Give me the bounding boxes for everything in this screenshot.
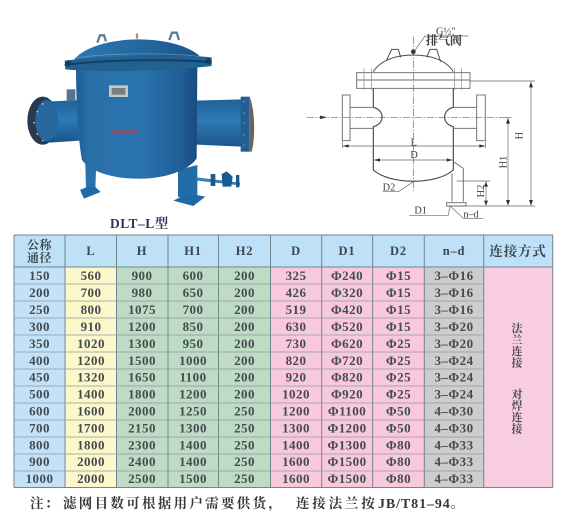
row 500: 3–Φ24 [434, 386, 474, 402]
row 900: 4–Φ33 [434, 454, 474, 469]
row 700: 250 [234, 420, 255, 436]
nameplate [109, 85, 128, 97]
row 200 [29, 285, 474, 300]
row 800 [29, 438, 474, 452]
row 300: 300 [29, 319, 50, 334]
row 350: 950 [183, 336, 203, 351]
row 500: 200 [234, 386, 255, 402]
row 450: 200 [234, 370, 255, 384]
row 600: Φ1100 [328, 404, 366, 418]
row 500: 1800 [128, 386, 156, 402]
row 250: 519 [286, 302, 306, 317]
row 1000 [26, 471, 474, 486]
row 700: Φ1200 [327, 420, 367, 436]
row 150: 150 [29, 268, 50, 283]
table header: H2 [236, 244, 253, 258]
row 350: 1020 [77, 336, 105, 351]
row 800: 1400 [282, 438, 310, 452]
row 900: 2400 [128, 454, 156, 469]
photo caption: DLT–L型 [110, 215, 169, 231]
table rows [26, 268, 474, 486]
drawing: labels: H [514, 131, 525, 139]
table header: D1 [339, 244, 355, 258]
drawing: labels: 排气阀 [426, 33, 462, 48]
row 1000: Φ1500 [327, 471, 367, 486]
row 600: Φ50 [386, 404, 411, 418]
row 400: 3–Φ24 [434, 353, 474, 368]
row 900: 2000 [77, 454, 105, 469]
row 350: 350 [29, 336, 50, 351]
row 500: 1400 [77, 386, 105, 402]
row 350 [29, 336, 474, 351]
row 700: Φ50 [386, 420, 411, 436]
row 1000: 4–Φ33 [434, 471, 474, 486]
table header: 公称 [27, 237, 52, 252]
connection type: butt weld: 焊 [510, 398, 522, 414]
row 700 [29, 420, 474, 436]
row 350: 1300 [128, 336, 156, 351]
row 800: 2300 [128, 438, 156, 452]
legs and drain valve [80, 163, 240, 206]
row 250: 250 [29, 302, 50, 317]
drawing: labels: H1 [499, 156, 510, 168]
connection type: butt weld: 对 [512, 386, 522, 402]
row 400: Φ25 [386, 353, 411, 368]
row 700: 1300 [282, 420, 310, 436]
connection type: butt weld: 连 [512, 409, 522, 425]
table header: n–d [443, 244, 465, 258]
drawing: dimension lines [307, 36, 535, 218]
row 350: Φ25 [386, 336, 411, 351]
connection type: flange: 兰 [512, 332, 522, 348]
connection type: flange [512, 320, 524, 370]
row 400: 400 [29, 353, 50, 368]
row 600: 600 [29, 404, 50, 418]
row 450: Φ25 [386, 370, 411, 384]
row 150: 3–Φ16 [434, 268, 474, 283]
row 150: Φ15 [386, 268, 411, 283]
row 300 [29, 319, 474, 334]
vessel lid [74, 39, 203, 60]
row 600 [29, 404, 474, 418]
row 300: 200 [234, 319, 255, 334]
row 200: Φ15 [386, 285, 411, 300]
row 350: 200 [234, 336, 255, 351]
row 150: 600 [183, 268, 203, 283]
row 800: 800 [29, 438, 50, 452]
row 150: 325 [286, 268, 306, 283]
row 500: Φ25 [386, 386, 411, 402]
row 350: 3–Φ20 [434, 336, 474, 351]
row 150: 200 [234, 268, 255, 283]
row 150 [29, 268, 474, 283]
footnote: 注： [30, 492, 60, 512]
row 600: 1250 [179, 404, 207, 418]
row 200: 3–Φ16 [434, 285, 474, 300]
drawing: vessel outline [342, 49, 485, 206]
row 450: 920 [286, 370, 306, 384]
row 200: Φ320 [331, 285, 363, 300]
row 600: 1200 [282, 404, 310, 418]
row 1000: 2000 [77, 471, 105, 486]
row 700: 4–Φ30 [434, 420, 474, 436]
row 250: 700 [183, 302, 203, 317]
row 250: 1075 [128, 302, 156, 317]
drawing: labels: H2 [476, 185, 487, 197]
table header: L [86, 244, 96, 258]
row 700: 700 [29, 420, 50, 436]
connection type: butt weld: 接 [512, 420, 524, 436]
row 1000: 1600 [282, 471, 310, 486]
row 900 [29, 454, 474, 469]
row 150: Φ240 [331, 268, 363, 283]
table header: D [291, 244, 301, 258]
row 350: 730 [286, 336, 306, 351]
right pipe [190, 96, 254, 152]
row 700: 1700 [77, 420, 105, 436]
row 500: 1200 [179, 386, 207, 402]
drawing: labels: D1 [414, 206, 427, 217]
row 250: Φ15 [386, 302, 411, 317]
drawing: labels: n–d [463, 210, 480, 221]
row 400: 820 [286, 353, 306, 368]
specification table [14, 235, 553, 488]
drawing: labels: G½" [436, 26, 455, 37]
row 300: 1200 [128, 319, 156, 334]
row 800: Φ1300 [327, 438, 367, 452]
row 250: 3–Φ16 [434, 302, 474, 317]
row 600: 1600 [77, 404, 105, 418]
connection type: flange: 法 [512, 320, 524, 336]
row 400: 200 [234, 353, 255, 368]
row 300: Φ520 [331, 319, 363, 334]
row 450: 450 [29, 370, 50, 384]
table header [27, 237, 547, 265]
row 200: 426 [286, 285, 306, 300]
table header: H [137, 244, 147, 258]
drawing: labels: D [410, 150, 418, 161]
row 400: 1500 [128, 353, 156, 368]
row 700: 2150 [128, 420, 156, 436]
row 200: 200 [234, 285, 255, 300]
row 400 [29, 353, 474, 368]
row 300: 910 [81, 319, 101, 334]
row 900: Φ80 [386, 454, 411, 469]
row 700: 1300 [179, 420, 207, 436]
left pipe [27, 89, 80, 145]
top flange [65, 54, 212, 71]
table column fills [14, 235, 553, 488]
row 200: 650 [183, 285, 203, 300]
row 250: Φ420 [331, 302, 363, 317]
row 450: 1320 [77, 370, 105, 384]
row 450 [29, 370, 474, 384]
row 300: Φ15 [386, 319, 411, 334]
row 200: 200 [29, 285, 50, 300]
row 250: 200 [234, 302, 255, 317]
photo: filter vessel [27, 33, 254, 206]
technical drawing [307, 26, 535, 221]
row 450: 1650 [128, 370, 156, 384]
row 350: Φ620 [331, 336, 363, 351]
row 1000: Φ80 [386, 471, 411, 486]
row 300: 3–Φ20 [434, 319, 474, 334]
row 800: 4–Φ33 [434, 438, 474, 452]
row 800: Φ80 [386, 438, 411, 452]
row 200: 700 [81, 285, 101, 300]
table header: 连接方式 [489, 243, 547, 259]
row 800: 250 [234, 438, 255, 452]
row 150: 900 [132, 268, 152, 283]
row 900: 250 [234, 454, 255, 469]
row 150: 560 [81, 268, 101, 283]
row 900: 1400 [179, 454, 207, 469]
footnote: 滤网目数可根据用户需要供货， [63, 492, 284, 512]
row 450: 1100 [179, 370, 207, 384]
row 500: 1020 [282, 386, 310, 402]
row 1000: 1000 [26, 471, 53, 486]
row 400: 1000 [179, 353, 207, 368]
connection type: butt weld [510, 386, 524, 436]
table grid [14, 235, 553, 488]
row 250 [29, 302, 474, 317]
row 400: 1200 [77, 353, 105, 368]
row 900: 1600 [282, 454, 310, 469]
row 600: 250 [234, 404, 255, 418]
row 300: 850 [183, 319, 203, 334]
row 300: 630 [286, 319, 306, 334]
vessel shell [76, 67, 197, 179]
footnote: JB/T81–94。 [378, 497, 466, 512]
row 1000: 250 [234, 471, 255, 486]
row 600: 2000 [128, 404, 156, 418]
row 900: Φ1500 [327, 454, 367, 469]
connection type: flange: 连 [512, 343, 522, 359]
table header: D2 [390, 244, 407, 258]
row 250: 800 [81, 302, 101, 317]
drawing: labels: L [411, 137, 417, 148]
row 600: 4–Φ30 [434, 404, 474, 418]
drawing: labels: D2 [383, 183, 395, 194]
table header: 通径 [27, 250, 52, 265]
row 800: 1400 [179, 438, 207, 452]
footnote [30, 492, 466, 512]
drawing: arrowheads [320, 49, 533, 206]
row 200: 980 [132, 285, 152, 300]
footnote: 连接法兰按 [296, 492, 378, 512]
connection type: flange: 接 [512, 354, 524, 370]
row 500 [29, 386, 474, 402]
row 800: 1800 [77, 438, 105, 452]
icon: lifting lugs [97, 33, 179, 43]
row 450: Φ820 [331, 370, 363, 384]
table header: H1 [184, 244, 202, 258]
row 1000: 1500 [179, 471, 207, 486]
red arrow mark [112, 129, 138, 135]
drawing: labels [383, 26, 525, 221]
row 900: 900 [29, 454, 50, 469]
row 500: 500 [29, 386, 50, 402]
row 500: Φ920 [331, 386, 363, 402]
row 450: 3–Φ24 [434, 370, 474, 384]
row 1000: 2500 [128, 471, 156, 486]
row 400: Φ720 [331, 353, 363, 368]
